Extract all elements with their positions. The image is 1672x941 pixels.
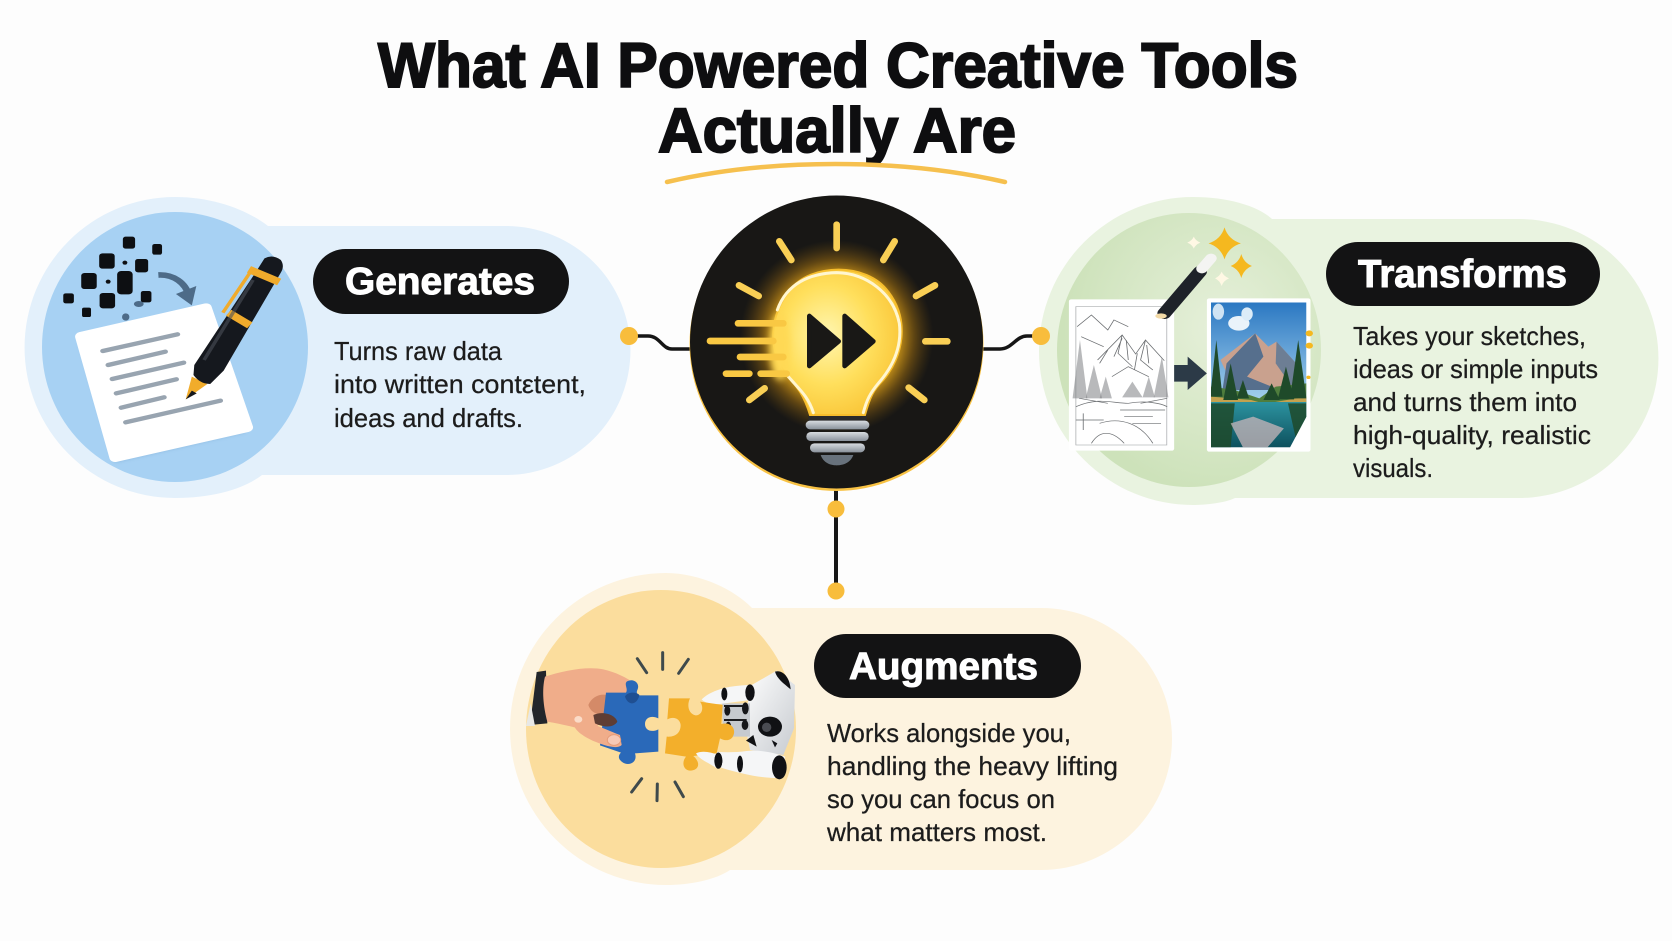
icon: pen xyxy=(186,257,283,399)
icon: data to document with pen xyxy=(63,237,283,463)
central icon: light bulb xyxy=(690,196,984,491)
icon: sketch to image with wand xyxy=(1069,227,1313,452)
pill: transforms xyxy=(1326,242,1600,306)
icon: landscape photo xyxy=(1207,298,1311,452)
pill: generates xyxy=(313,249,569,314)
speed lines xyxy=(710,313,790,380)
icon: paper xyxy=(80,308,247,463)
pill: augments xyxy=(814,634,1081,698)
icon: magic wand xyxy=(1155,258,1211,319)
panel: transforms xyxy=(1039,197,1658,505)
panel shape xyxy=(25,197,630,498)
title underline xyxy=(667,164,1005,182)
text: augments description xyxy=(826,718,1118,847)
icon: data pixels xyxy=(63,237,162,321)
icon disc xyxy=(690,197,984,491)
bulb glass xyxy=(773,270,902,415)
icon: blue puzzle piece xyxy=(593,680,658,764)
panel: augments xyxy=(510,573,1172,885)
icon: robot hand xyxy=(696,671,795,779)
pill: augments: Augments xyxy=(849,646,1038,688)
title xyxy=(378,31,1298,166)
text: generates description xyxy=(334,336,586,433)
circle backdrop xyxy=(42,212,308,482)
light rays xyxy=(739,225,947,400)
text: transforms description: visuals. xyxy=(1353,453,1433,483)
text: augments description: so you can focus on xyxy=(827,784,1055,814)
icon: curved arrow xyxy=(158,275,196,305)
panel shape xyxy=(510,573,1172,885)
title: What AI Powered Creative Tools xyxy=(378,31,1298,101)
icon: human and robot hands with puzzle pieces xyxy=(526,653,795,801)
circle backdrop xyxy=(526,590,796,868)
icon: human thumb xyxy=(574,716,622,747)
panel shape xyxy=(1039,197,1658,505)
icon: arrow xyxy=(1174,357,1207,390)
text: generates description: Turns raw data xyxy=(334,336,503,366)
text: transforms description: Takes your sketches, xyxy=(1353,321,1586,351)
icon: yellow puzzle piece xyxy=(665,698,734,771)
text: generates description: into written contεtent, xyxy=(334,369,586,399)
text: transforms description: ideas or simple inputs xyxy=(1353,354,1598,384)
bulb glow xyxy=(740,240,933,433)
text: generates description: ideas and drafts. xyxy=(334,403,523,433)
connector: bottom xyxy=(828,486,844,600)
connector: right xyxy=(978,327,1050,349)
text: augments description: handling the heavy lifting xyxy=(827,751,1118,781)
text: transforms description: and turns them into xyxy=(1353,387,1577,417)
text: transforms description: high-quality, realistic xyxy=(1353,420,1591,450)
icon: human hand back xyxy=(526,668,635,732)
pill: generates: Generates xyxy=(345,261,535,303)
text: augments description: what matters most. xyxy=(826,817,1047,847)
connector: left xyxy=(620,327,695,349)
icon: spark lines xyxy=(632,653,688,801)
bulb base xyxy=(806,416,869,465)
icon: sparkles xyxy=(1187,227,1313,379)
icon: sketch card xyxy=(1069,299,1174,451)
text: augments description: Works alongside you, xyxy=(827,718,1071,748)
circle backdrop xyxy=(1057,213,1321,487)
pill: transforms: Transforms xyxy=(1358,253,1567,296)
fast forward symbol xyxy=(809,316,873,366)
panel: generates xyxy=(25,197,630,498)
text: transforms description xyxy=(1353,321,1598,483)
title: Actually Are xyxy=(658,96,1016,166)
